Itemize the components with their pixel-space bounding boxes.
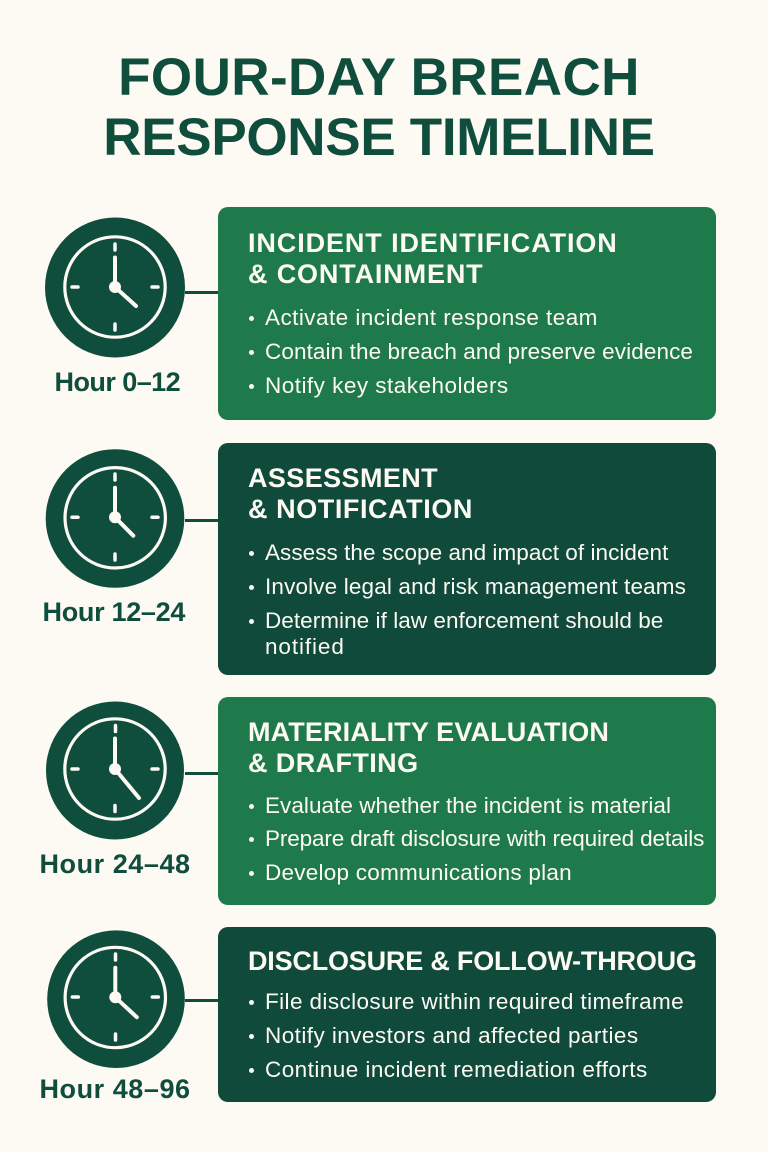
heading <box>248 463 473 524</box>
clock 3 icon <box>46 702 184 840</box>
heading <box>248 717 609 778</box>
panel: materiality <box>218 697 716 905</box>
bullet 3: Develop communications plan <box>265 860 572 885</box>
bullet 2: Prepare draft disclosure with required details <box>265 826 704 851</box>
title: RESPONSE TIMELINE <box>103 108 655 167</box>
clock 4 icon <box>47 930 185 1068</box>
bullet 3: Continue incident remediation efforts <box>265 1057 648 1082</box>
connector 1 <box>185 290 218 294</box>
heading: & DRAFTING <box>248 748 418 778</box>
bullet 2: Notify investors and affected parties <box>265 1023 639 1048</box>
panel: disclosure <box>218 927 716 1102</box>
hour label 3: Hour 24–48 <box>40 849 191 879</box>
heading: INCIDENT IDENTIFICATION <box>248 228 618 258</box>
heading: & NOTIFICATION <box>248 494 473 524</box>
clock 1 icon <box>45 218 185 358</box>
heading: MATERIALITY EVALUATION <box>248 717 609 747</box>
clock 2 icon <box>46 449 184 588</box>
panel: incident identification <box>218 207 716 420</box>
bullet 1: File disclosure within required timeframe <box>265 989 684 1014</box>
hour label 2: Hour 12–24 <box>42 597 185 627</box>
bullet 3: Notify key stakeholders <box>265 373 509 398</box>
bullet 1: Activate incident response team <box>265 305 598 330</box>
bullet 2: Contain the breach and preserve evidence <box>265 339 693 364</box>
connector 4 <box>185 999 218 1002</box>
bullet 2: Involve legal and risk management teams <box>265 574 686 599</box>
bullet 3: Determine if law enforcement should be <box>265 608 663 633</box>
bullet 1: Assess the scope and impact of incident <box>265 540 668 565</box>
title: FOUR-DAY BREACH <box>118 48 640 107</box>
connector 2 <box>185 519 218 522</box>
bullet 3 <box>265 608 663 660</box>
hour label 1: Hour 0–12 <box>54 367 180 397</box>
heading: DISCLOSURE & FOLLOW-THROUG <box>248 946 697 976</box>
panel: assessment <box>218 443 716 675</box>
connector 3 <box>185 772 218 774</box>
hour label 4: Hour 48–96 <box>40 1074 191 1104</box>
heading <box>248 228 618 289</box>
bullet 1: Evaluate whether the incident is material <box>265 793 671 818</box>
heading: ASSESSMENT <box>248 463 438 493</box>
title <box>103 48 655 167</box>
bullet 3: notified <box>265 634 345 659</box>
heading: & CONTAINMENT <box>248 259 484 289</box>
